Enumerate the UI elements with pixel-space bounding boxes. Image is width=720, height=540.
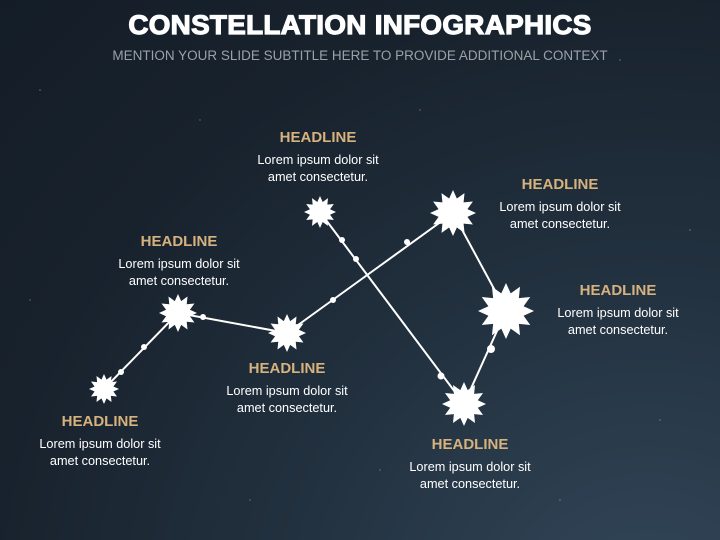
constellation lines: [104, 212, 506, 404]
text: left: [118, 233, 240, 288]
text: middle: Lorem ipsum dolor sit: [226, 384, 348, 398]
text: top center: [257, 129, 379, 184]
text: bottom: HEADLINE: [432, 436, 508, 453]
text: top right: Lorem ipsum dolor sit: [499, 200, 621, 214]
text: bottom: Lorem ipsum dolor sit: [409, 460, 531, 474]
text: top right: [499, 176, 621, 231]
text: bottom left: amet consectetur.: [50, 454, 150, 468]
text: bottom: amet consectetur.: [420, 477, 520, 491]
text: right: Lorem ipsum dolor sit: [557, 306, 679, 320]
text: bottom: [409, 436, 531, 491]
title: CONSTELLATION INFOGRAPHICS: [128, 10, 592, 40]
text: bottom left: HEADLINE: [62, 413, 138, 430]
text: top right: HEADLINE: [522, 176, 598, 193]
text: middle: HEADLINE: [249, 360, 325, 377]
text: middle: [226, 360, 348, 415]
text: top center: Lorem ipsum dolor sit: [257, 153, 379, 167]
text: top center: HEADLINE: [280, 129, 356, 146]
subtitle: MENTION YOUR SLIDE SUBTITLE HERE TO PROVIDE ADDITIONAL CONTEXT: [112, 48, 608, 63]
text: bottom left: [39, 413, 161, 468]
text: top center: amet consectetur.: [268, 170, 368, 184]
text: right: [557, 282, 679, 337]
text: right: amet consectetur.: [568, 323, 668, 337]
text: left: HEADLINE: [141, 233, 217, 250]
text: bottom left: Lorem ipsum dolor sit: [39, 437, 161, 451]
text: right: HEADLINE: [580, 282, 656, 299]
text: left: Lorem ipsum dolor sit: [118, 257, 240, 271]
text: top right: amet consectetur.: [510, 217, 610, 231]
text: left: amet consectetur.: [129, 274, 229, 288]
stars: [89, 190, 534, 426]
text: middle: amet consectetur.: [237, 401, 337, 415]
